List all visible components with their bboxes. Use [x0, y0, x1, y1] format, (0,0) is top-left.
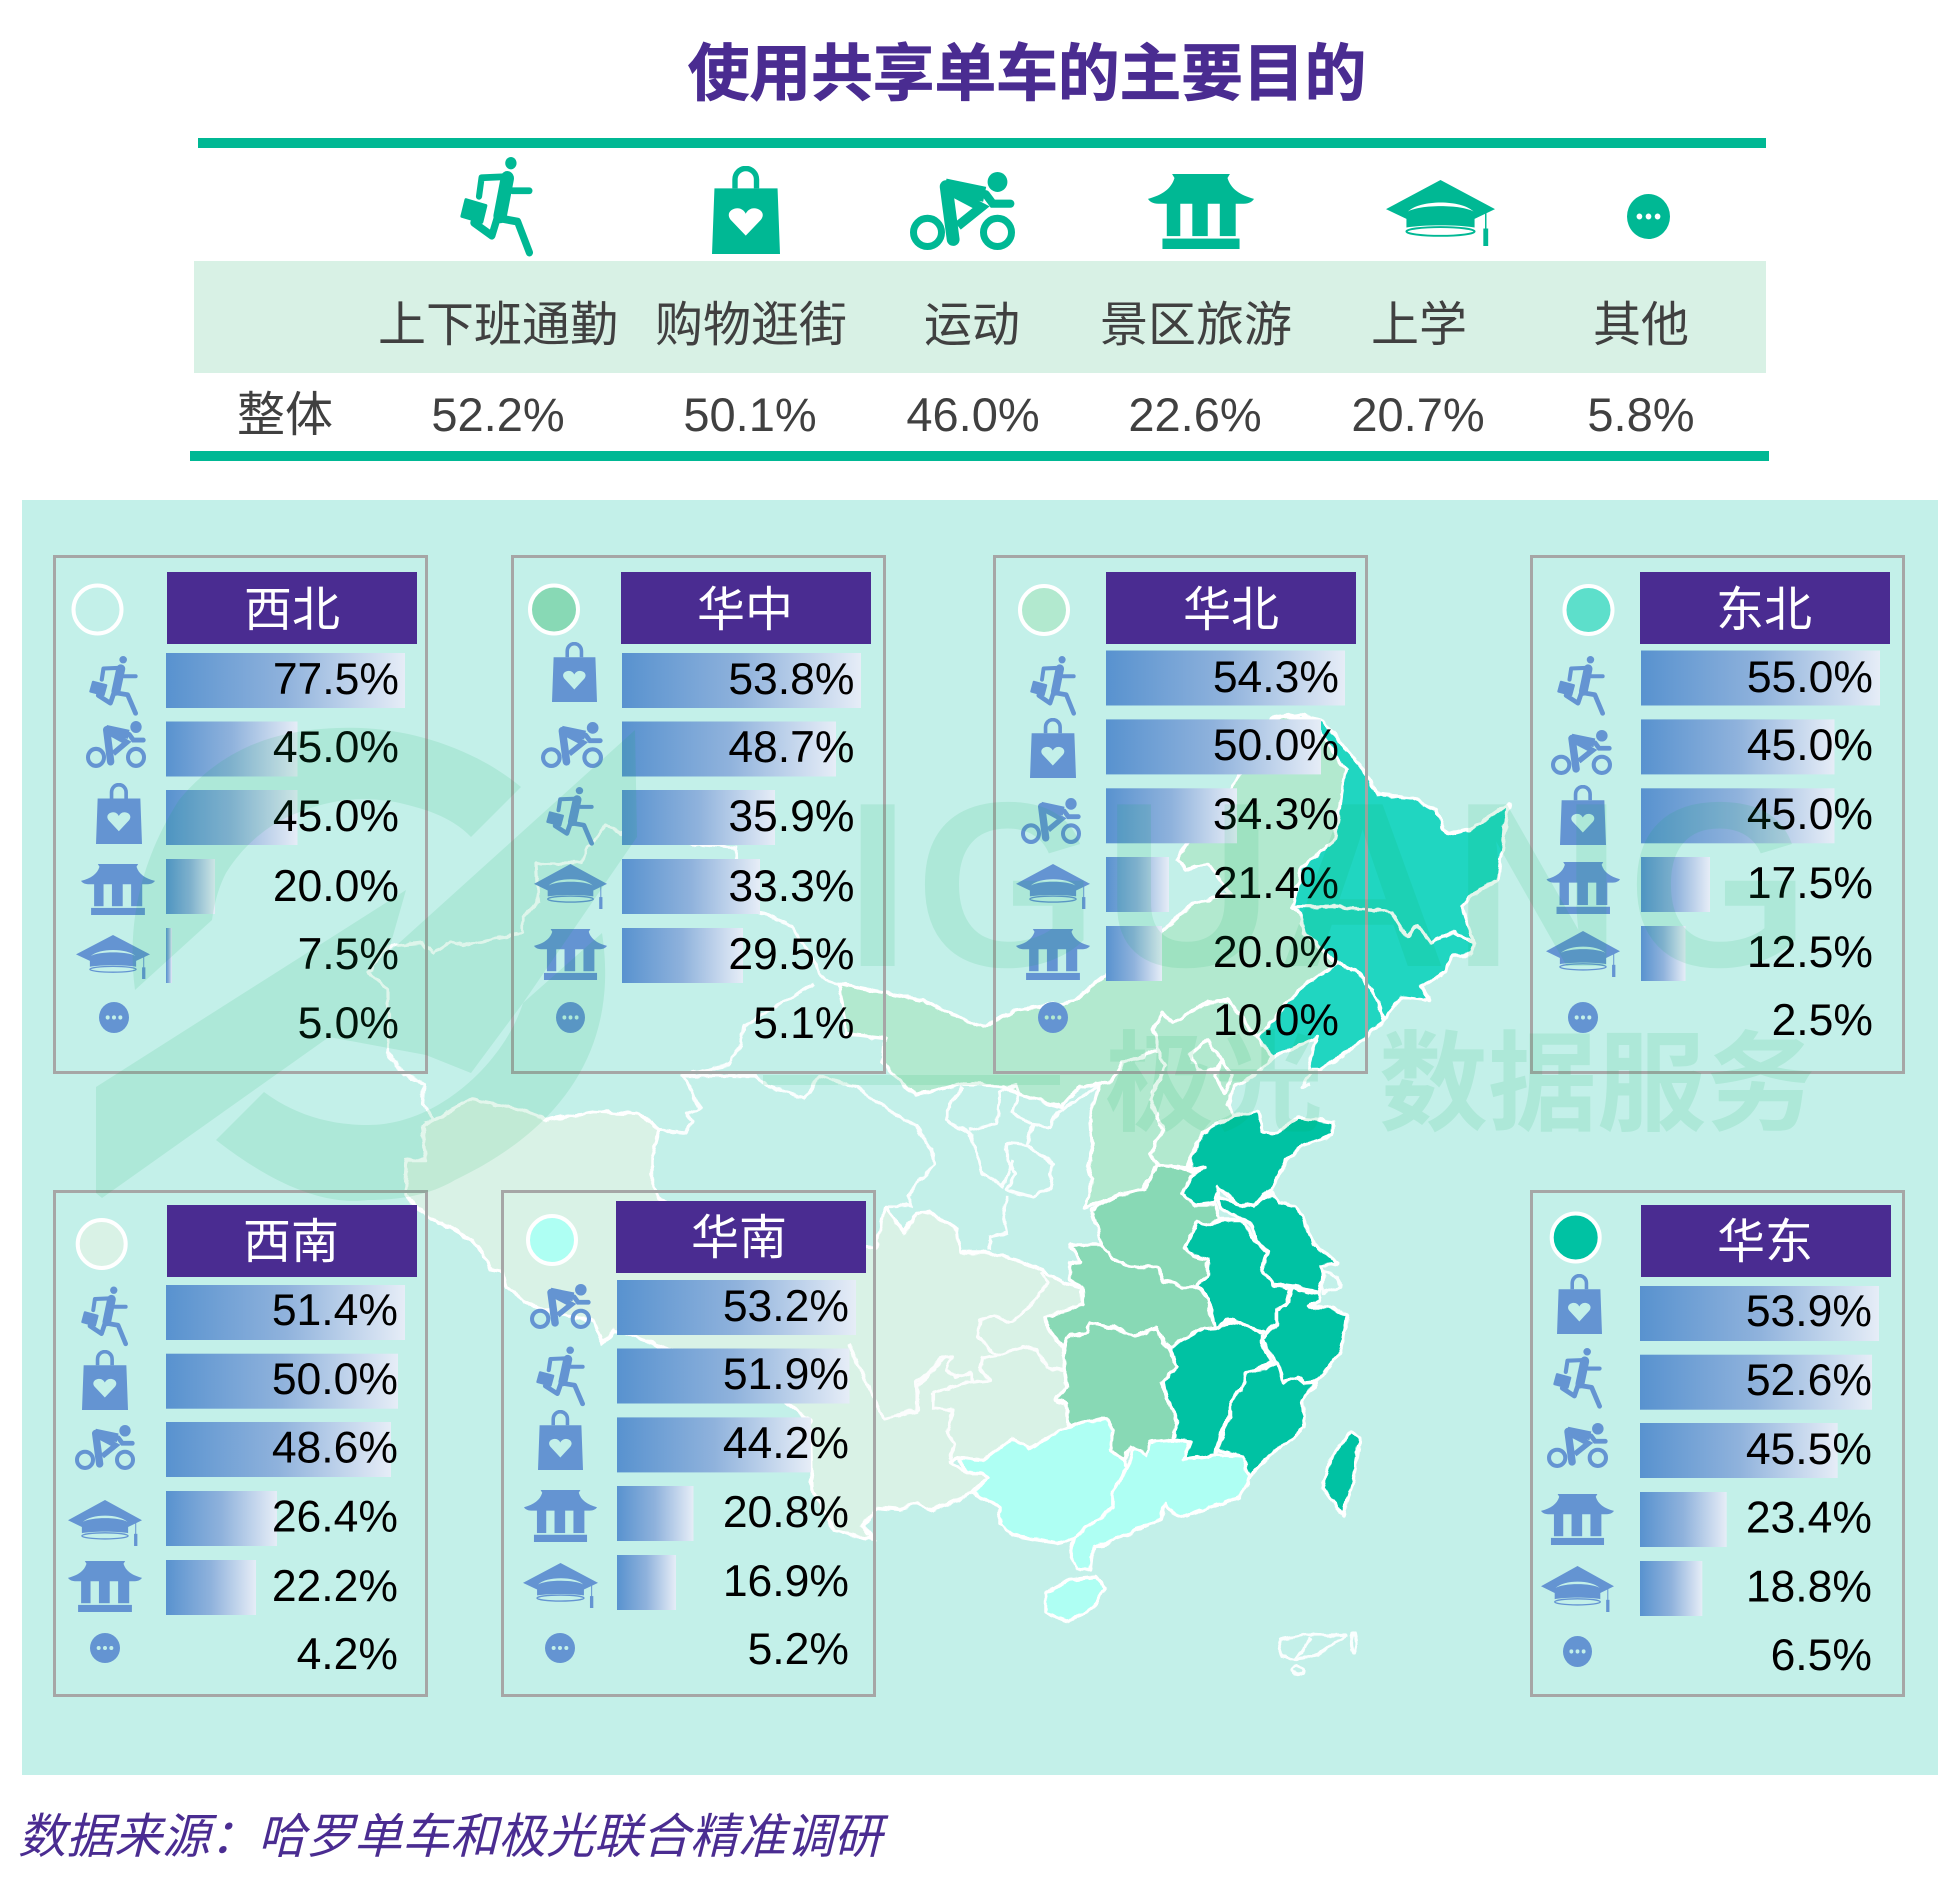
icon: cyclist — [914, 172, 1012, 246]
row: tourism: 20.0% — [273, 862, 399, 911]
row: shopping: 50.0% — [1213, 721, 1339, 770]
legend dot — [78, 1220, 126, 1268]
panel: 华东 — [1532, 1192, 1904, 1696]
row: commute: 51.4% — [272, 1286, 398, 1335]
region header — [621, 572, 871, 644]
row: tourism: 20.8% — [723, 1488, 849, 1537]
column: tourism — [1100, 174, 1292, 441]
province borders: northwest and southwest — [368, 825, 1340, 1460]
row: school: 18.8% — [1746, 1562, 1872, 1612]
row: commute: 55.0% — [1747, 653, 1873, 702]
row: exercise — [1553, 719, 1873, 774]
row: shopping — [1560, 787, 1873, 845]
region: east China — [1163, 1112, 1360, 1515]
region header — [167, 572, 417, 644]
row: other — [545, 1625, 849, 1674]
row: tourism — [81, 859, 399, 915]
legend dot — [1552, 1214, 1600, 1262]
row: shopping: 53.9% — [1746, 1287, 1872, 1336]
watermark wordmark: IGUANG — [845, 753, 1810, 1016]
region header — [1640, 572, 1890, 644]
row: shopping — [1557, 1276, 1879, 1341]
row: other: 5.2% — [748, 1625, 849, 1674]
row: tourism — [534, 928, 854, 983]
row: commute: 51.9% — [723, 1350, 849, 1399]
row: school — [1541, 1561, 1872, 1616]
region header: 东北 — [1716, 584, 1812, 637]
row: other — [1568, 996, 1873, 1045]
value: 52.2% — [431, 388, 565, 441]
region: southwest — [405, 1099, 1083, 1540]
row: tourism — [1016, 926, 1339, 981]
row: exercise: 48.6% — [272, 1424, 398, 1472]
region header: 西南 — [243, 1216, 339, 1269]
row: school: 21.4% — [1213, 859, 1339, 908]
row: school — [68, 1491, 398, 1546]
icon: temple — [1148, 174, 1254, 249]
row: commute — [546, 787, 854, 845]
column: commute — [378, 157, 618, 441]
legend dot — [1564, 586, 1612, 634]
row: school — [1016, 857, 1339, 912]
frame — [512, 556, 884, 1072]
row: shopping: 45.0% — [1747, 790, 1873, 839]
row: exercise — [77, 1422, 398, 1477]
bottom rule — [190, 451, 1769, 461]
panel: 华中 — [512, 556, 884, 1072]
region: north China — [839, 718, 1346, 1208]
row: shopping — [82, 1352, 398, 1410]
row: commute — [89, 653, 405, 713]
region header: 华中 — [697, 584, 793, 637]
row: shopping: 50.0% — [272, 1355, 398, 1404]
legend dot — [530, 586, 578, 634]
row: school: 16.9% — [723, 1557, 849, 1606]
frame — [54, 1192, 426, 1696]
row: school: 12.5% — [1747, 928, 1873, 977]
watermark subtitle — [1105, 1024, 1815, 1146]
row: tourism: 17.5% — [1747, 859, 1873, 908]
row: exercise: 45.0% — [1747, 721, 1873, 770]
row: commute — [81, 1285, 405, 1344]
watermark subtitle: 极光 — [1105, 1024, 1323, 1146]
row label: overall: 整体 — [237, 389, 333, 442]
row: commute — [536, 1346, 850, 1404]
map background panel — [22, 500, 1938, 1775]
row: commute — [1557, 650, 1880, 713]
row: shopping: 53.8% — [728, 655, 854, 704]
value: 22.6% — [1128, 388, 1262, 441]
row: exercise: 45.0% — [273, 723, 399, 772]
row: tourism — [1541, 1492, 1872, 1547]
label: 景区旅游 — [1100, 299, 1292, 352]
row: commute — [1030, 650, 1345, 713]
panel: 华南 — [502, 1192, 874, 1696]
label: 运动 — [924, 299, 1020, 352]
row: other: 5.1% — [753, 999, 854, 1048]
column: school — [1351, 180, 1495, 441]
frame — [502, 1192, 874, 1696]
row: other: 10.0% — [1213, 996, 1339, 1045]
row: shopping — [552, 644, 861, 708]
region: south China — [957, 1420, 1250, 1622]
frame — [1532, 556, 1904, 1072]
label: 上下班通勤 — [378, 299, 618, 352]
row: school — [1546, 926, 1873, 981]
value: 46.0% — [906, 388, 1040, 441]
panel: 西北 — [54, 556, 426, 1072]
row: shopping — [96, 785, 399, 845]
icon: shopping bag — [712, 168, 780, 254]
region header — [167, 1205, 417, 1277]
frame — [1532, 1192, 1904, 1696]
map of China — [368, 714, 1509, 1675]
watermark subtitle: 数据服务 — [1379, 1024, 1815, 1146]
region header — [616, 1201, 866, 1273]
row: commute: 77.5% — [273, 655, 399, 704]
row: commute: 52.6% — [1746, 1356, 1872, 1405]
row: shopping: 45.0% — [273, 792, 399, 841]
header band — [194, 261, 1766, 373]
panel: 西南 — [54, 1192, 426, 1696]
row: school: 33.3% — [728, 862, 854, 911]
column: shopping — [655, 168, 847, 441]
row: exercise: 53.2% — [723, 1282, 849, 1331]
row: other: 4.2% — [297, 1630, 398, 1679]
row: exercise: 45.5% — [1746, 1425, 1872, 1474]
row: commute: 54.3% — [1213, 653, 1339, 702]
icon: graduation cap — [1386, 180, 1495, 246]
frame — [994, 556, 1366, 1072]
watermark logo — [96, 728, 637, 1201]
row: other — [99, 999, 399, 1048]
row: tourism — [524, 1486, 849, 1542]
region header: 华南 — [691, 1212, 787, 1265]
row: tourism: 29.5% — [728, 930, 854, 979]
legend dot — [1020, 586, 1068, 634]
label: 上学 — [1371, 299, 1467, 352]
row: other: 2.5% — [1772, 996, 1873, 1045]
watermark: logo and wordmark — [96, 728, 1815, 1201]
row: shopping — [1030, 719, 1339, 778]
source note: 数据来源：哈罗单车和极光联合精准调研 — [18, 1811, 889, 1864]
panel: 华北 — [994, 556, 1366, 1072]
summary table — [190, 138, 1769, 461]
region header: 华北 — [1183, 584, 1279, 637]
row: tourism: 23.4% — [1746, 1494, 1872, 1542]
row: other — [556, 999, 854, 1048]
icon: more dots — [1627, 194, 1670, 239]
row: tourism: 22.2% — [272, 1562, 398, 1611]
value: 50.1% — [683, 388, 817, 441]
row: exercise — [532, 1280, 856, 1335]
row: tourism — [1546, 857, 1873, 914]
row: exercise: 48.7% — [728, 723, 854, 772]
row: commute: 35.9% — [728, 792, 854, 841]
row: school — [534, 859, 854, 914]
row: other — [1038, 996, 1339, 1045]
row: school — [76, 928, 399, 983]
row: exercise — [1023, 788, 1339, 843]
region header — [1641, 1205, 1891, 1277]
icon: runner — [460, 157, 529, 253]
value: 20.7% — [1351, 388, 1485, 441]
row: commute — [1553, 1348, 1872, 1410]
row: exercise — [88, 721, 399, 776]
row: other — [1563, 1631, 1872, 1680]
row: tourism — [68, 1560, 398, 1615]
row: shopping — [538, 1412, 849, 1472]
value: 5.8% — [1587, 388, 1695, 441]
legend dot — [528, 1216, 576, 1264]
row: exercise: 34.3% — [1213, 790, 1339, 839]
row: school: 7.5% — [298, 930, 399, 979]
label: 购物逛街 — [655, 299, 847, 352]
South China Sea islands — [1279, 1633, 1357, 1675]
row: other: 5.0% — [298, 999, 399, 1048]
watermark bar — [763, 1075, 1060, 1085]
row: exercise — [1549, 1423, 1872, 1478]
legend dot — [74, 586, 122, 634]
row: school: 26.4% — [272, 1492, 398, 1542]
row: shopping: 44.2% — [723, 1419, 849, 1468]
region header — [1106, 572, 1356, 644]
row: tourism: 20.0% — [1213, 928, 1339, 977]
column: other — [1587, 194, 1695, 441]
label: 其他 — [1593, 299, 1689, 352]
region: central China — [1045, 1165, 1220, 1460]
panel: 东北 — [1532, 556, 1904, 1072]
row: exercise — [543, 722, 854, 776]
region: northeast — [1257, 714, 1509, 1070]
title: 使用共享单车的主要目的 — [688, 40, 1366, 109]
row: other: 6.5% — [1771, 1631, 1872, 1680]
frame — [54, 556, 426, 1072]
column: exercise — [906, 172, 1040, 441]
region header: 西北 — [244, 584, 340, 637]
region header: 华东 — [1717, 1216, 1813, 1269]
row: other — [90, 1630, 398, 1679]
top rule — [198, 138, 1766, 148]
row: school — [523, 1555, 849, 1610]
